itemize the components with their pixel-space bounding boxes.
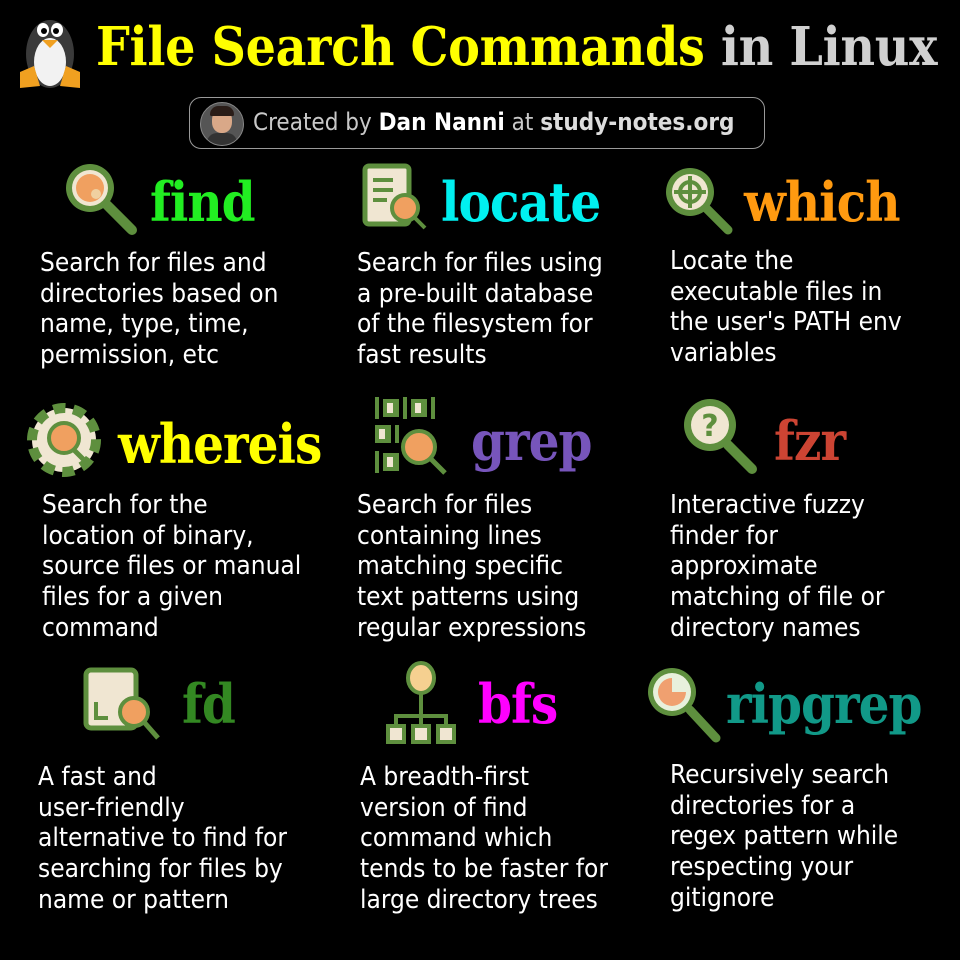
description: directories based on bbox=[40, 279, 278, 309]
description bbox=[360, 762, 608, 915]
title: File Search Commands in Linux bbox=[96, 16, 937, 78]
icon: grid magnifier bbox=[375, 397, 447, 475]
icon: tree bbox=[386, 661, 456, 744]
heading: which: which bbox=[744, 170, 900, 234]
description: containing lines bbox=[357, 521, 542, 551]
description: alternative to find for bbox=[38, 823, 287, 853]
avatar bbox=[200, 102, 244, 146]
description: command bbox=[42, 613, 159, 643]
description: Search for the bbox=[42, 490, 208, 520]
description: regex pattern while bbox=[670, 821, 898, 851]
panel: locate bbox=[357, 164, 603, 370]
heading: locate: locate bbox=[441, 170, 600, 234]
description: files for a given bbox=[42, 582, 223, 612]
description: approximate bbox=[670, 551, 818, 581]
heading: fzr: fzr bbox=[774, 409, 845, 473]
description: source files or manual bbox=[42, 551, 301, 581]
description: fast results bbox=[357, 340, 487, 370]
description: Interactive fuzzy bbox=[670, 490, 865, 520]
icon: magnifier pie bbox=[648, 668, 720, 742]
panel: fd bbox=[38, 668, 287, 915]
description: directory names bbox=[670, 613, 861, 643]
icon: magnifier bbox=[66, 164, 137, 235]
panel: fzr bbox=[670, 399, 885, 643]
description bbox=[670, 490, 885, 643]
description bbox=[670, 760, 898, 913]
description: Recursively search bbox=[670, 760, 889, 790]
description: respecting your bbox=[670, 852, 853, 882]
description bbox=[38, 762, 287, 915]
panel: find bbox=[40, 164, 278, 370]
description: searching for files by bbox=[38, 854, 283, 884]
heading: ripgrep: ripgrep bbox=[726, 672, 921, 736]
description: Search for files using bbox=[357, 248, 603, 278]
description: A breadth-first bbox=[360, 762, 529, 792]
icon: folder magnifier bbox=[84, 668, 160, 740]
description: directories for a bbox=[670, 791, 855, 821]
description bbox=[670, 246, 902, 368]
panel: grep bbox=[357, 397, 591, 643]
panel: ripgrep bbox=[648, 668, 921, 913]
description: the user's PATH env bbox=[670, 307, 902, 337]
description: A fast and bbox=[38, 762, 157, 792]
description: name, type, time, bbox=[40, 309, 249, 339]
heading: grep: grep bbox=[471, 409, 591, 473]
description: a pre-built database bbox=[357, 279, 593, 309]
description: of the filesystem for bbox=[357, 309, 593, 339]
credit text: Created by Dan Nanni at study-notes.org bbox=[253, 108, 734, 136]
heading: find: find bbox=[150, 170, 255, 234]
icon: question magnifier: ? bbox=[701, 409, 719, 444]
description: Locate the bbox=[670, 246, 793, 276]
panel: bfs bbox=[360, 661, 608, 915]
credit pill bbox=[189, 97, 765, 149]
description: executable files in bbox=[670, 277, 882, 307]
description: variables bbox=[670, 338, 777, 368]
icon: document search bbox=[362, 164, 426, 230]
description bbox=[357, 248, 603, 370]
icon: gear magnifier bbox=[27, 403, 101, 477]
panel: whereis bbox=[27, 403, 321, 643]
description: matching of file or bbox=[670, 582, 885, 612]
description: permission, etc bbox=[40, 340, 219, 370]
description: tends to be faster for bbox=[360, 854, 608, 884]
description bbox=[357, 490, 586, 643]
heading: fd: fd bbox=[182, 672, 235, 736]
description: matching specific bbox=[357, 551, 563, 581]
icon: question magnifier bbox=[684, 399, 757, 474]
description: finder for bbox=[670, 521, 778, 551]
description: location of binary, bbox=[42, 521, 254, 551]
heading: whereis: whereis bbox=[118, 412, 321, 476]
icon: penguin bbox=[20, 20, 80, 88]
description: text patterns using bbox=[357, 582, 579, 612]
description: name or pattern bbox=[38, 885, 229, 915]
description: gitignore bbox=[670, 883, 774, 913]
description: command which bbox=[360, 823, 552, 853]
heading: bfs: bfs bbox=[478, 672, 557, 736]
panel: which bbox=[666, 168, 902, 368]
description: version of find bbox=[360, 793, 527, 823]
description: regular expressions bbox=[357, 613, 586, 643]
description: Search for files bbox=[357, 490, 532, 520]
description bbox=[40, 248, 278, 370]
description: large directory trees bbox=[360, 885, 598, 915]
icon: target magnifier bbox=[666, 168, 732, 234]
description bbox=[42, 490, 301, 643]
description: Search for files and bbox=[40, 248, 267, 278]
description: user-friendly bbox=[38, 793, 185, 823]
